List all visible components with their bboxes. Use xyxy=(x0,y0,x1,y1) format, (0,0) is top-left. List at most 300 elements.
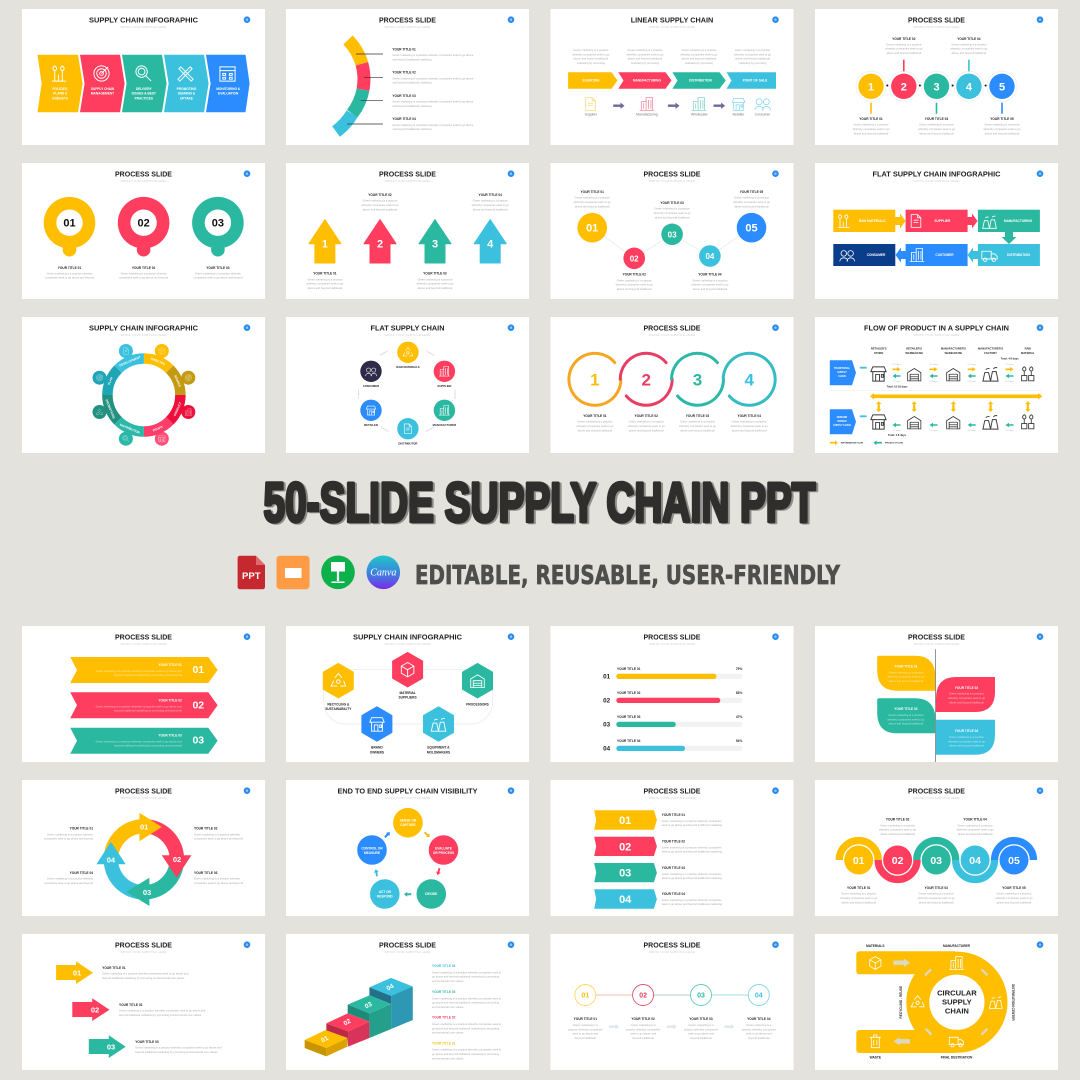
timeline captions: beyond traditional xyxy=(748,1036,770,1040)
pin captions: YOUR TITLE 03 xyxy=(206,266,230,270)
node control: CONTROL OR xyxy=(361,846,383,850)
description columns: marketing by promoting xyxy=(685,61,713,65)
node numbers: 05 xyxy=(745,223,758,235)
total note bottom: Total: 4-8 days xyxy=(888,433,907,437)
badge xyxy=(508,170,514,177)
badge xyxy=(508,941,514,948)
node retailer xyxy=(360,400,382,427)
description columns: marketing by promoting xyxy=(577,61,605,65)
subtitle: WRITE YOUR SUBTITLE HERE xyxy=(649,642,695,646)
node distributor xyxy=(397,418,419,445)
step captions: environmental core values. xyxy=(432,979,464,983)
transport labels: Transport xyxy=(357,389,360,399)
right captions: Green marketing is a practice whereby xyxy=(194,832,241,836)
hexagon processors: PROCESSORS xyxy=(466,702,489,706)
slide: linear supply chain xyxy=(550,9,794,145)
captions top: YOUR TITLE 04 xyxy=(963,817,987,821)
chevron 5: EVALUATION xyxy=(218,92,239,96)
captions lower: whereby companies seek to go xyxy=(616,283,653,287)
bar 3: YOUR TITLE 03 xyxy=(617,715,641,719)
leaf 3: above and beyond traditional xyxy=(889,722,924,726)
ring labels: DIRECTED xyxy=(150,357,167,366)
bar 2: YOUR TITLE 02 xyxy=(617,691,641,695)
captions above: Green marketing is a practice xyxy=(473,199,508,203)
card xyxy=(286,317,529,453)
hexagon recycling: SUSTAINABILITY xyxy=(325,707,352,711)
box raw materials xyxy=(833,210,895,232)
card xyxy=(550,317,794,453)
chevron 4: DEMAND & xyxy=(178,92,196,96)
stage labels: MATERIALS xyxy=(866,944,884,948)
captions lower: whereby companies seek to go xyxy=(691,283,729,287)
ring captions: YOUR TITLE 02 xyxy=(635,414,658,418)
chevron 3: PRACTICES xyxy=(135,96,153,100)
durations: 2-3 days xyxy=(1005,381,1015,383)
description columns: whereby companies seek to go xyxy=(734,52,772,56)
node decide: DECIDE xyxy=(425,892,437,896)
up arrow 3 xyxy=(419,220,451,263)
left captions: companies seek to go above and beyond xyxy=(44,881,93,885)
leaf 3: whereby companies seek to go xyxy=(887,717,925,721)
subtitle: WRITE YOUR SUBTITLE HERE xyxy=(384,25,431,29)
leaf 2: Green marketing is a practice xyxy=(949,692,985,696)
node supplier: SUPPLIER xyxy=(437,384,451,388)
hexagon equipment xyxy=(423,706,454,754)
captions top: above and beyond traditional xyxy=(880,832,915,836)
leaf 1: whereby companies seek to go xyxy=(887,675,925,679)
box customer: CUSTOMER xyxy=(935,253,954,257)
ribbon 1: 01 xyxy=(192,664,204,676)
tag 4: Green marketing is a practice whereby companies xyxy=(662,898,722,902)
badge xyxy=(1037,16,1043,23)
tag 1 xyxy=(594,810,722,830)
tag 3: seek to go above and beyond traditional marketing xyxy=(662,876,722,880)
numbers xyxy=(868,81,1005,93)
ring labels: PRODUCT xyxy=(173,401,182,417)
title: LINEAR SUPPLY CHAIN xyxy=(631,16,713,24)
chevron 1: PLANS & xyxy=(53,92,68,96)
hexagon material suppliers xyxy=(392,652,423,700)
wave circles xyxy=(844,846,1028,874)
badge xyxy=(1037,324,1043,331)
title: PROCESS SLIDE xyxy=(908,16,965,24)
card xyxy=(22,163,265,299)
leaf 1 xyxy=(877,656,936,691)
captions above: YOUR TITLE 04 xyxy=(479,193,502,197)
timeline captions: practice whereby companies xyxy=(684,1027,719,1031)
subtitle: WRITE YOUR SUBTITLE HERE xyxy=(120,333,167,337)
bar 4: 04 xyxy=(603,746,611,753)
step captions: YOUR TITLE 03 xyxy=(432,990,456,994)
leaf 1: YOUR TITLE 01 xyxy=(894,664,918,668)
ribbon 1 xyxy=(70,657,218,683)
subtitle: WRITE YOUR SUBTITLE HERE xyxy=(914,179,960,183)
box customer xyxy=(906,244,968,266)
card xyxy=(550,9,794,145)
hexagon brand owners xyxy=(361,706,392,754)
description columns: whereby companies seek to go xyxy=(572,52,610,56)
title: FLOW OF PRODUCT IN A SUPPLY CHAIN xyxy=(864,324,1009,332)
step captions: YOUR TITLE 04 xyxy=(432,964,456,968)
traditional chain tag: SUPPLY xyxy=(837,371,847,374)
slide: numbered circles timeline xyxy=(815,9,1058,145)
captions bottom: Green marketing is a practice xyxy=(996,892,1032,896)
captions bottom: YOUR TITLE 05 xyxy=(1002,886,1026,890)
arrow 2: YOUR TITLE 02 xyxy=(119,1003,143,1007)
card xyxy=(815,934,1058,1070)
right captions: YOUR TITLE 03 xyxy=(194,871,218,875)
left captions: YOUR TITLE 01 xyxy=(70,827,93,831)
captions below: Green marketing is a practice xyxy=(307,277,343,281)
ring captions: above and beyond traditional xyxy=(578,428,613,432)
captions below: YOUR TITLE 03 xyxy=(423,271,447,275)
node manufacturer: MANUFACTURER xyxy=(433,423,456,427)
tag 4: YOUR TITLE 04 xyxy=(662,892,685,896)
leaf 4: Green marketing is a practice xyxy=(949,735,985,739)
box supplier: SUPPLIER xyxy=(934,219,951,223)
bar 1 xyxy=(603,667,742,681)
slide: zigzag circles xyxy=(550,163,794,299)
captions upper: above and beyond traditional xyxy=(655,215,690,219)
slide: linked rings xyxy=(550,317,794,453)
arrow heads xyxy=(96,813,191,906)
leaf 2: above and beyond traditional xyxy=(949,700,984,704)
right captions: YOUR TITLE 02 xyxy=(194,827,218,831)
subtitle: WRITE YOUR SUBTITLE HERE xyxy=(914,333,960,337)
card xyxy=(815,780,1058,916)
column headers: WAREHOUSE xyxy=(905,351,923,355)
ribbon 1: YOUR TITLE 01 xyxy=(158,663,182,667)
timeline captions: seek to go above and xyxy=(572,1032,599,1036)
leaf 3: Green marketing is a practice xyxy=(888,713,924,717)
slide: ring infographic xyxy=(22,317,265,453)
badge xyxy=(772,941,779,948)
node numbers xyxy=(586,223,758,263)
timeline captions: Green marketing is a xyxy=(631,1023,656,1027)
captions bottom: above and beyond traditional xyxy=(841,900,876,904)
up arrow 2: 2 xyxy=(377,238,383,250)
box distribution xyxy=(978,244,1040,266)
right captions: Green marketing is a practice whereby xyxy=(194,877,241,881)
timeline captions: YOUR TITLE 02 xyxy=(631,1017,655,1021)
stage labels: MANUFACTURER xyxy=(943,944,971,948)
node consumer: CONSUMER xyxy=(363,384,379,388)
badge xyxy=(508,787,514,794)
description columns: above and beyond traditional xyxy=(628,57,663,61)
captions lower: above and beyond traditional xyxy=(617,287,652,291)
hexagon recycling: RECYCLING & xyxy=(327,702,350,706)
ring labels: DISTRIBUTION xyxy=(119,423,141,435)
node decide xyxy=(416,879,446,909)
item 3: and beyond traditional marketing. xyxy=(392,104,432,108)
subtitle: WRITE YOUR SUBTITLE HERE xyxy=(914,642,960,646)
bar 3: 03 xyxy=(603,722,611,729)
node act: ACT OR xyxy=(379,890,392,894)
timeline captions: practice whereby companies xyxy=(626,1027,661,1031)
durations: 1-2 days xyxy=(968,430,977,432)
labels top: whereby companies seek to go xyxy=(950,47,988,51)
left captions: Green marketing is a practice whereby xyxy=(47,832,94,836)
forward arrows xyxy=(892,367,1014,372)
stairs xyxy=(305,978,413,1056)
box distribution: DISTRIBUTION xyxy=(1007,253,1031,257)
numbers: 4 xyxy=(966,81,973,93)
captions top: Green marketing is a practice xyxy=(958,823,993,827)
captions lower: above and beyond traditional xyxy=(693,287,728,291)
labels bottom: above and beyond traditional xyxy=(919,131,954,135)
title: PROCESS SLIDE xyxy=(644,940,700,950)
up arrow 2 xyxy=(364,220,396,263)
ring captions: whereby companies seek to go xyxy=(731,424,768,428)
ribbon 1: beyond traditional marketing by promoting environmental xyxy=(114,673,182,677)
wave numbers: 01 xyxy=(853,855,865,867)
chevron 5: MONITORING & xyxy=(216,87,240,91)
ring labels xyxy=(104,355,182,435)
title: PROCESS SLIDE xyxy=(379,940,436,950)
ring numbers xyxy=(590,370,754,390)
format icon: Google Slides xyxy=(276,556,310,589)
captions bottom: YOUR TITLE 01 xyxy=(847,886,871,890)
total note top: Total: 4-8 days xyxy=(1001,356,1019,360)
tag 3: 03 xyxy=(619,868,631,880)
demand chain tag: DRIVEN xyxy=(837,420,847,423)
title: FLAT SUPPLY CHAIN xyxy=(370,324,444,332)
step captions: environmental core values. xyxy=(432,1056,464,1060)
labels bottom: YOUR TITLE 05 xyxy=(990,117,1014,121)
captions bottom: whereby companies seek to go xyxy=(918,896,955,900)
slide: curved band process xyxy=(286,9,529,145)
ring labels: PROMOTIONS xyxy=(104,399,116,419)
card xyxy=(815,626,1058,762)
card xyxy=(550,163,794,299)
wave numbers: 03 xyxy=(930,855,942,867)
numbers: 1 xyxy=(868,81,874,93)
column headers: STORE xyxy=(874,351,884,355)
subtitle: WRITE YOUR SUBTITLE HERE xyxy=(384,642,431,646)
tag 3: YOUR TITLE 03 xyxy=(662,866,685,870)
divider xyxy=(830,389,1042,391)
badge xyxy=(244,633,250,640)
stage labels: Manufacturing xyxy=(636,112,658,116)
stage labels: Consumer xyxy=(755,112,771,116)
timeline captions: YOUR TITLE 01 xyxy=(574,1017,597,1021)
gray arrows xyxy=(894,958,910,1046)
chevron 4 xyxy=(164,55,209,112)
column headers: WAREHOUSE xyxy=(945,351,962,355)
arrow 2: Green marketing is a practice whereby companies seek to go above and xyxy=(119,1008,206,1012)
chevron 4: UPTAKE xyxy=(180,96,193,100)
transport labels: Transport xyxy=(379,349,389,357)
chevron 3 xyxy=(122,55,167,112)
ring captions: Green marketing is a practice xyxy=(577,420,613,424)
ring captions: Green marketing is a practice xyxy=(629,420,664,424)
curved band xyxy=(336,40,364,132)
chevron 3: ISSUES & BEST xyxy=(132,92,156,96)
column headers: MANUFACTURER'S xyxy=(941,346,966,350)
ribbon 3: 03 xyxy=(192,735,204,747)
timeline captions: Green marketing is a xyxy=(689,1023,714,1027)
description columns: Green marketing is a practice xyxy=(627,48,663,52)
subtitle: WRITE YOUR SUBTITLE HERE xyxy=(649,179,695,183)
subtitle: WRITE YOUR SUBTITLE HERE xyxy=(384,179,431,183)
connector ticks xyxy=(871,60,1002,114)
captions bottom: Green marketing is a practice xyxy=(919,892,954,896)
arrow 2 xyxy=(72,998,206,1021)
subtitle: WRITE YOUR SUBTITLE HERE xyxy=(384,950,431,954)
step captions xyxy=(432,964,502,1060)
hexagon material suppliers: SUPPLIERS xyxy=(399,696,417,700)
card xyxy=(22,317,265,453)
box supplier xyxy=(906,210,968,232)
traditional chain tag: CHAIN xyxy=(838,375,846,378)
captions below: above and beyond traditional xyxy=(418,286,453,290)
pin captions: companies seek to go above and beyond xyxy=(193,276,243,280)
wave numbers: 02 xyxy=(892,855,904,867)
leaf 3: YOUR TITLE 03 xyxy=(894,707,918,711)
card xyxy=(22,934,265,1070)
arrow 1: Green marketing is a practice whereby companies seek to go above and xyxy=(102,971,189,975)
captions upper: YOUR TITLE 01 xyxy=(581,190,604,194)
captions upper: Green marketing is a practice xyxy=(655,207,690,211)
captions top: YOUR TITLE 02 xyxy=(886,817,910,821)
description columns: whereby companies seek to go xyxy=(626,52,664,56)
bar 2 xyxy=(603,691,742,705)
leaf 3 xyxy=(877,698,936,733)
slide: staggered arrows xyxy=(22,934,265,1070)
box consumer xyxy=(833,244,895,266)
tag 2 xyxy=(594,837,722,856)
ring captions: YOUR TITLE 03 xyxy=(686,414,709,418)
durations: 1-2 days xyxy=(929,430,939,432)
bar 1: 79% xyxy=(736,667,742,671)
bar 4: YOUR TITLE 04 xyxy=(617,739,641,743)
item 3: YOUR TITLE 03 xyxy=(392,94,416,98)
tag 4 xyxy=(594,889,722,909)
left captions: companies seek to go above and beyond xyxy=(44,837,93,841)
pin captions: Green marketing is a practice whereby xyxy=(195,271,242,275)
description columns: whereby companies seek to go xyxy=(680,52,718,56)
item 2: and beyond traditional marketing. xyxy=(392,81,432,85)
tagline: EDITABLE, REUSABLE, USER-FRIENDLY xyxy=(415,561,841,591)
up arrow 3: 3 xyxy=(432,238,438,250)
leaf 1: above and beyond traditional xyxy=(889,679,924,683)
bar 3 xyxy=(603,715,742,729)
leaf 4: YOUR TITLE 04 xyxy=(955,729,978,733)
step captions: YOUR TITLE 02 xyxy=(432,1016,456,1020)
labels top: Green marketing is a practice xyxy=(886,42,922,46)
node sense: SENSE OR xyxy=(400,819,417,823)
small arrows xyxy=(609,1024,734,1029)
ring numbers: 4 xyxy=(744,370,754,390)
pin captions: companies seek to go above and beyond xyxy=(45,276,95,280)
column headers: RETAILER'S xyxy=(871,346,887,350)
timeline numbers: 02 xyxy=(639,992,647,1000)
title: PROCESS SLIDE xyxy=(644,786,700,796)
card xyxy=(550,780,794,916)
title: PROCESS SLIDE xyxy=(644,324,700,332)
ring labels: SOURCE xyxy=(173,374,182,388)
labels bottom: above and beyond traditional xyxy=(985,131,1020,135)
pin captions: YOUR TITLE 02 xyxy=(132,266,156,270)
item 4: and beyond traditional marketing. xyxy=(392,127,432,131)
captions above: Green marketing is a practice xyxy=(362,199,398,203)
title: PROCESS SLIDE xyxy=(115,632,172,642)
subtitle: WRITE YOUR SUBTITLE HERE xyxy=(649,950,695,954)
card xyxy=(815,9,1058,145)
numbers: 3 xyxy=(933,81,940,93)
captions bottom: whereby companies seek to go xyxy=(840,896,878,900)
labels top: above and beyond traditional xyxy=(887,51,921,55)
column headers: RETAILER'S xyxy=(906,346,922,350)
captions top: whereby companies seek to go xyxy=(879,828,917,832)
arrow 3 xyxy=(89,1035,222,1058)
ring captions: above and beyond traditional xyxy=(732,428,767,432)
timeline lines xyxy=(596,994,748,996)
card xyxy=(286,163,529,299)
tag 4: seek to go above and beyond traditional marketing xyxy=(662,902,722,906)
bar 3: 47% xyxy=(736,715,742,719)
timeline captions: practice whereby companies xyxy=(568,1027,603,1031)
captions above: whereby companies seek to go xyxy=(472,203,509,207)
title: PROCESS SLIDE xyxy=(644,170,700,178)
captions above: YOUR TITLE 02 xyxy=(368,193,392,197)
left captions xyxy=(44,827,94,885)
pin 1 xyxy=(44,197,95,256)
node numbers: 01 xyxy=(586,223,598,235)
pin captions: companies seek to go above and beyond xyxy=(119,276,169,280)
captions bottom: Green marketing is a practice xyxy=(841,892,877,896)
captions top: Green marketing is a practice xyxy=(880,823,916,827)
yellow U shape xyxy=(856,951,996,1053)
ribbon 2: Green marketing is a practice whereby companies seek to go above and xyxy=(96,704,182,708)
timeline nodes xyxy=(575,984,769,1006)
card xyxy=(286,626,529,762)
node numbers: 04 xyxy=(705,252,715,261)
timeline captions: YOUR TITLE 03 xyxy=(689,1017,713,1021)
leaf 1: Green marketing is a practice xyxy=(888,670,924,674)
chevron 1: POLICIES, xyxy=(52,87,68,91)
horizontal double arrow xyxy=(870,393,1042,400)
card xyxy=(550,934,794,1070)
stem xyxy=(934,649,936,762)
node manufacturer xyxy=(433,400,456,427)
captions top: above and beyond traditional xyxy=(958,832,993,836)
title: FLAT SUPPLY CHAIN INFOGRAPHIC xyxy=(872,170,1001,178)
badge xyxy=(772,633,779,640)
arrow 3: Green marketing is a practice whereby companies seek to go above and xyxy=(135,1045,222,1049)
bar 1: 01 xyxy=(603,674,611,681)
durations: 2-3 days xyxy=(892,381,902,383)
title: SUPPLY CHAIN INFOGRAPHIC xyxy=(89,324,198,332)
captions bottom: above and beyond traditional xyxy=(919,900,954,904)
arrow band: MANUFACTURING xyxy=(633,79,661,83)
arrow band: DISTRIBUTION xyxy=(689,79,713,83)
cycle ring arcs xyxy=(111,826,177,892)
bar 2: 02 xyxy=(603,698,611,705)
slide: flat supply chain cycle xyxy=(286,317,529,453)
column headers: FACTORY xyxy=(984,351,997,355)
wave numbers: 04 xyxy=(969,855,981,867)
bar 1: YOUR TITLE 01 xyxy=(617,667,641,671)
leaf 2: whereby companies seek to go xyxy=(948,696,986,700)
tag 3: Green marketing is a practice whereby companies xyxy=(662,872,722,876)
subtitle: WRITE YOUR SUBTITLE HERE xyxy=(649,333,695,337)
node retailer: RETAILER xyxy=(364,423,378,427)
chevron 1 xyxy=(38,55,83,112)
slide: flat supply chain boxes xyxy=(815,163,1058,299)
loop line xyxy=(324,670,493,724)
badge xyxy=(244,170,250,177)
